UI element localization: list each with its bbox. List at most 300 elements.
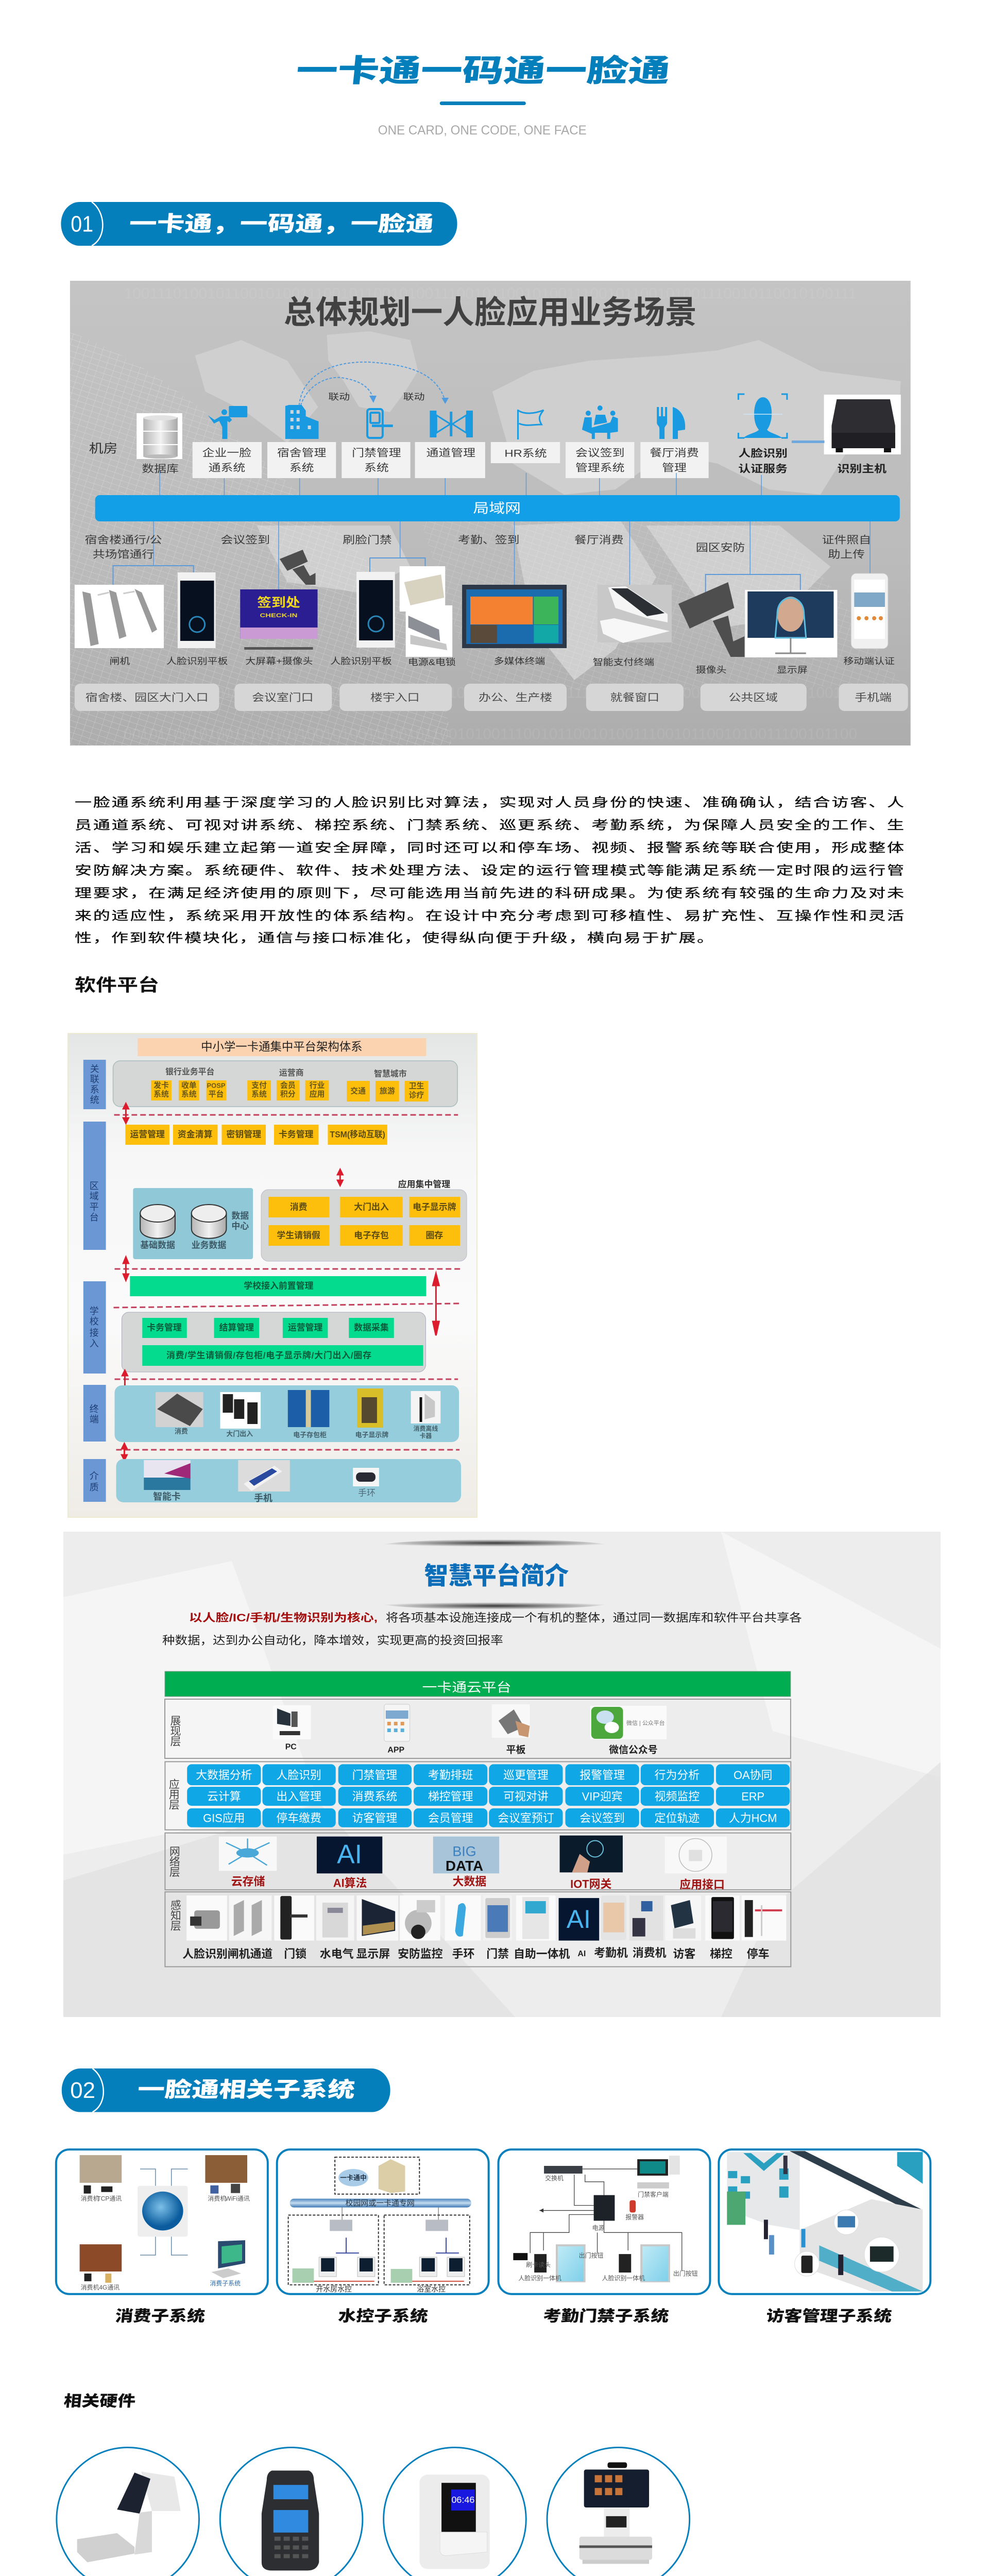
- related systems group: 会员: [280, 1080, 296, 1090]
- perception layer: 知: [170, 1910, 181, 1922]
- device labels: 访客: [673, 1947, 695, 1960]
- binary backdrop: 0010110010100111001011001010011100101100101001110010110010100111001011001010011100101100: [124, 725, 857, 743]
- network layer: [165, 1833, 791, 1891]
- machine room label: 机房: [89, 442, 117, 455]
- perception layer: [165, 1892, 791, 1967]
- card: attendance access subsystem: 门禁客户端: [638, 2191, 669, 2198]
- icon: IoT: [560, 1836, 623, 1872]
- terminal group: 大门出入: [226, 1430, 253, 1438]
- related systems group: 诊疗: [409, 1090, 424, 1100]
- scenario labels: 助上传: [828, 549, 865, 560]
- terminal group: 电子显示牌: [355, 1431, 388, 1439]
- icon: face recognition: [738, 394, 787, 438]
- application management group: 圈存: [425, 1230, 443, 1241]
- card: water control subsystem: [277, 2149, 489, 2294]
- product captions: 多媒体终端: [494, 656, 545, 666]
- section header 02: 一脸通相关子系统: [137, 2078, 356, 2102]
- application layer: VIP迎宾: [582, 1790, 623, 1803]
- card: water control subsystem: 一卡通中: [340, 2174, 367, 2181]
- application management group: 大门出入: [354, 1202, 389, 1212]
- subsystem captions: 消费子系统: [114, 2308, 206, 2325]
- hardware: dual screen scale: [547, 2448, 690, 2576]
- application management group: 学生请销假: [277, 1230, 320, 1241]
- section header 01: 一卡通，一码通，一脸通: [128, 212, 435, 236]
- icon: big data: BIG: [452, 1844, 476, 1859]
- box: HR: HR系统: [504, 448, 547, 459]
- subtitle: ONE CARD, ONE CODE, ONE FACE: [378, 123, 587, 138]
- subsystem captions: 考勤门禁子系统: [542, 2308, 670, 2325]
- media group: 手机: [254, 1493, 272, 1503]
- school access group: 卡务管理: [147, 1322, 182, 1333]
- layer labels: 域: [90, 1191, 99, 1201]
- application layer: 会议签到: [579, 1811, 625, 1824]
- box: access system: 门禁管理: [352, 447, 401, 459]
- icon: PC: [273, 1705, 311, 1739]
- location chips: [75, 684, 908, 711]
- presentation layer: PC: [285, 1742, 297, 1752]
- binary backdrop: 1001110100101100101001110010110010100111001011001010011100101100101001110010110010100111: [124, 285, 857, 302]
- panel heading: 总体规划一人脸应用业务场景: [284, 295, 697, 331]
- application management group: 消费: [290, 1202, 308, 1212]
- application layer: 巡更管理: [503, 1769, 549, 1782]
- application layer: 梯控管理: [428, 1790, 473, 1803]
- related systems group: 收单: [181, 1081, 197, 1090]
- panel: face application business scenario: [70, 281, 911, 745]
- icon: dorm building: [285, 405, 318, 439]
- body paragraph: 一脸通系统利用基于深度学习的人脸识别比对算法，实现对人员身份的快速、准确确认，结合访客、人: [75, 796, 904, 809]
- school access group: 消费/学生请销假/存包柜/电子显示牌/大门出入/圈存: [166, 1350, 371, 1361]
- presentation layer: [165, 1699, 791, 1758]
- card: consumption subsystem: 消费子系统: [210, 2280, 241, 2287]
- related systems group: 应用: [310, 1089, 325, 1099]
- body paragraph: [75, 796, 904, 945]
- product captions: 移动端认证: [843, 656, 895, 666]
- box: canteen: [640, 442, 709, 478]
- product: multimedia terminal: [462, 585, 567, 648]
- heading bottom shadow: [374, 1602, 615, 1609]
- body paragraph: 安防解决方案。系统硬件、软件、技术处理方法、设定的运行管理模式等能满足系统一定时限的运行管: [75, 864, 904, 877]
- school access group: 运营管理: [288, 1322, 322, 1333]
- card: water control subsystem: 校园网或一卡通专网: [346, 2199, 415, 2208]
- backdrop polygons: [63, 1532, 941, 1855]
- media group: 智能卡: [153, 1491, 181, 1502]
- linkage arcs: [299, 362, 445, 405]
- cloud platform bar: [165, 1671, 791, 1697]
- scenario labels: 会议签到: [220, 534, 270, 546]
- icon: big data: DATA: [446, 1858, 483, 1874]
- related systems group: 系统: [154, 1089, 169, 1099]
- database label: 数据库: [142, 463, 179, 474]
- network layer: 应用接口: [679, 1878, 725, 1891]
- icon: door lock: [367, 409, 383, 438]
- icon: wechat: 微信 | 公众平台: [626, 1719, 665, 1726]
- location chips: 宿舍楼、园区大门入口: [86, 692, 209, 703]
- application layer: GIS应用: [203, 1811, 245, 1824]
- related systems group: 卫生: [409, 1081, 424, 1091]
- scenario labels: 证件照自: [822, 534, 871, 546]
- section header 02: 02: [70, 2078, 95, 2103]
- scenario labels: 共场馆通行: [93, 549, 154, 560]
- application layer: 人脸识别: [276, 1769, 321, 1782]
- related systems group: 系统: [251, 1089, 267, 1099]
- application layer: 用: [169, 1789, 180, 1801]
- related systems group: 智慧城市: [374, 1069, 407, 1079]
- software platform heading: 软件平台: [75, 975, 159, 995]
- panel: smart platform intro: [63, 1532, 941, 2017]
- card: attendance access subsystem: [499, 2149, 710, 2294]
- application layer: 定位轨迹: [655, 1811, 700, 1824]
- layer labels: 接: [90, 1328, 99, 1338]
- lower platform layers: [165, 1761, 791, 1967]
- scenario labels: 餐厅消费: [574, 534, 624, 546]
- box: canteen: 餐厅消费: [650, 447, 699, 459]
- product captions: 智能支付终端: [593, 657, 654, 667]
- card: water control subsystem: 浴室水控: [417, 2285, 446, 2293]
- layer labels: 台: [90, 1212, 99, 1223]
- box: enterprise system: [193, 442, 262, 478]
- hardware and product list: [57, 2448, 926, 2576]
- presentation layer: 微信公众号: [609, 1744, 658, 1756]
- card: attendance access subsystem: 人脸识别一体机: [602, 2275, 645, 2282]
- related systems group: 支付: [251, 1081, 267, 1090]
- media group: 手环: [358, 1488, 376, 1498]
- subsystem captions: 访客管理子系统: [765, 2308, 893, 2325]
- heading: 智慧平台简介: [424, 1563, 569, 1589]
- card: water control subsystem: 开水房水控: [316, 2285, 352, 2293]
- hardware: water control: [384, 2448, 526, 2576]
- product captions: 显示屏: [777, 665, 808, 675]
- application layer: 考勤排班: [428, 1769, 473, 1782]
- related systems group: 银行业务平台: [165, 1066, 214, 1077]
- layer labels: 介: [90, 1471, 99, 1481]
- icon: recognition host: [824, 395, 901, 454]
- icon: enterprise person: [208, 406, 247, 439]
- heading top shadow: [374, 1539, 615, 1547]
- product: camera 2: [678, 582, 744, 657]
- intro red lead: 以人脸/IC/手机/生物识别为核心,: [189, 1612, 378, 1624]
- network layer: 网: [169, 1846, 180, 1858]
- application layer: OA协同: [734, 1769, 772, 1782]
- box: channel: 通道管理: [426, 447, 475, 459]
- layer labels: [83, 1060, 106, 1502]
- product captions: 电源&电锁: [408, 657, 456, 667]
- school access group: 数据采集: [354, 1322, 389, 1333]
- product: display: [745, 590, 837, 657]
- application layer: 层: [169, 1799, 180, 1811]
- connector: [792, 440, 825, 443]
- presentation layer: APP: [387, 1745, 404, 1755]
- terminal group: 卡器: [420, 1432, 432, 1439]
- arrow: [433, 1274, 439, 1335]
- terminal group: 消费: [175, 1427, 188, 1435]
- host label: 识别主机: [837, 463, 886, 474]
- divider: [113, 1303, 461, 1308]
- arrow: [123, 1257, 128, 1280]
- icon: channel gate: [430, 411, 473, 437]
- layer labels: 关: [90, 1064, 99, 1074]
- box: dorm system: [267, 442, 336, 478]
- application layer: 会议室预订: [498, 1811, 554, 1824]
- product: power box and lock: [400, 566, 452, 657]
- connectors to LAN: [160, 471, 761, 495]
- card: visitor management subsystem: [719, 2149, 930, 2294]
- related systems group: 交通: [350, 1086, 366, 1096]
- linkage label: 联动: [328, 392, 350, 402]
- product captions: 大屏幕+摄像头: [245, 656, 313, 666]
- icon: meeting: [582, 405, 618, 439]
- application layer: 访客管理: [352, 1811, 397, 1824]
- box: access system: 系统: [364, 462, 389, 473]
- panel: platform architecture: [68, 1033, 477, 1517]
- device images: [186, 1895, 786, 1941]
- product: face tablet 2: [356, 572, 395, 648]
- intro line 1: 将各项基本设施连接成一个有机的整体，通过同一数据库和软件平台共享各: [386, 1612, 802, 1624]
- application layer: 大数据分析: [196, 1769, 252, 1782]
- scenario labels: 考勤、签到: [458, 534, 520, 546]
- layer labels: 质: [90, 1482, 99, 1493]
- intro line 2: 种数据，达到办公自动化，降本增效，实现更高的投资回报率: [162, 1634, 503, 1647]
- presentation layer: 层: [170, 1736, 181, 1748]
- application management group: 电子显示牌: [413, 1202, 456, 1212]
- school access bar: [130, 1276, 426, 1296]
- linkage label 2: 联动: [403, 392, 424, 402]
- application management group: [261, 1190, 467, 1261]
- media group: [116, 1459, 461, 1503]
- product: big screen: CHECK-IN: [260, 612, 297, 618]
- page header: [61, 54, 672, 246]
- product captions: 闸机: [110, 656, 130, 666]
- terminal group: 电子存包柜: [293, 1431, 327, 1439]
- card: consumption subsystem: TCP通讯: [97, 2195, 122, 2202]
- application layer: 云计算: [207, 1790, 241, 1803]
- icon: tablet: [492, 1704, 530, 1738]
- body paragraph: 活、学习和娱乐建立起第一道安全屏障，同时还可以和停车场、视频、报警系统等联合使用，形成整体: [75, 841, 904, 855]
- device labels: 水电气: [320, 1947, 354, 1960]
- related systems group: 平台: [209, 1089, 224, 1099]
- device labels: [182, 1946, 769, 1960]
- network layer: 大数据: [453, 1875, 486, 1888]
- related systems group: 行业: [310, 1081, 325, 1090]
- card: consumption subsystem: 消费机: [81, 2284, 99, 2291]
- product: big screen: 签到处: [257, 596, 300, 609]
- icon: cutlery: [657, 407, 685, 439]
- location chips: 办公、生产楼: [479, 692, 552, 703]
- application layer: 应: [169, 1779, 180, 1791]
- divider: [116, 1449, 459, 1451]
- card: consumption subsystem: 消费机: [81, 2195, 99, 2202]
- product: turnstile: [75, 585, 164, 648]
- perception layer: 层: [170, 1920, 181, 1932]
- location chips: 楼宇入口: [370, 692, 419, 703]
- platform orange row: TSM(移动互联): [330, 1129, 385, 1140]
- body paragraph: 员通道系统、可视对讲系统、梯控系统、门禁系统、巡更系统、考勤系统，为保障人员安全的工作、生: [75, 819, 904, 832]
- box: HR: [491, 442, 560, 463]
- network layer: 络: [169, 1856, 180, 1868]
- perception layer: 感: [170, 1900, 181, 1911]
- application layer: 停车缴费: [276, 1811, 321, 1824]
- device labels: 消费机: [633, 1946, 667, 1959]
- icon: app interface: [665, 1837, 727, 1873]
- device labels: 手环: [452, 1947, 474, 1960]
- location chips: 手机端: [855, 692, 892, 703]
- device labels: 显示屏: [356, 1947, 390, 1960]
- layer labels: 系: [90, 1084, 99, 1095]
- divider: [114, 1114, 458, 1116]
- box: enterprise system: 企业一脸: [202, 447, 251, 459]
- device labels: 人脸识别闸机通道: [182, 1947, 272, 1960]
- related systems group: 旅游: [380, 1086, 395, 1096]
- architecture title: [138, 1038, 426, 1056]
- device labels: 门锁: [284, 1947, 306, 1960]
- product captions: [110, 656, 895, 675]
- layer labels: 区: [90, 1181, 99, 1191]
- box: dorm system: 宿舍管理: [277, 447, 327, 459]
- device labels: AI: [577, 1950, 586, 1958]
- application layer: 可视对讲: [503, 1790, 549, 1803]
- box: canteen: 管理: [662, 462, 687, 473]
- scenario labels: [84, 534, 871, 560]
- device labels: 安防监控: [398, 1947, 443, 1960]
- network layer: IOT网关: [570, 1878, 611, 1891]
- related systems group: POSP: [207, 1081, 226, 1090]
- layer labels: 端: [90, 1414, 99, 1425]
- box: access system: [342, 442, 411, 478]
- face recognition service label: [738, 448, 788, 474]
- icon: wechat: [590, 1706, 667, 1739]
- network layer: 云存储: [231, 1875, 265, 1888]
- school access group: 结算管理: [219, 1322, 254, 1333]
- layer labels: 学: [90, 1306, 99, 1316]
- location chips: 公共区域: [729, 692, 778, 703]
- box: meeting: 管理系统: [575, 462, 624, 473]
- terminal group: 消费离线: [414, 1425, 438, 1432]
- icon: HR flag: [518, 410, 543, 439]
- product: face tablet: [178, 572, 215, 648]
- product: payment terminal: [598, 585, 672, 643]
- card: attendance access subsystem: 出门按钮: [673, 2269, 698, 2277]
- section header 02: [62, 2069, 390, 2112]
- system label boxes: [193, 442, 709, 478]
- arrow: [122, 1370, 127, 1392]
- box: meeting: [566, 442, 634, 478]
- device labels: 门禁: [486, 1947, 509, 1960]
- layer labels: 联: [90, 1074, 99, 1084]
- box: enterprise system: 通系统: [209, 462, 245, 473]
- card: consumption subsystem: WiFi通讯: [225, 2195, 250, 2202]
- network layer: 层: [169, 1867, 180, 1878]
- LAN bar: 局域网: [473, 501, 521, 516]
- intro header and presentation layer: [162, 1539, 802, 1758]
- face recognition service label: 人脸识别: [738, 448, 788, 459]
- device images: AI: [567, 1905, 591, 1934]
- network layer: AI算法: [333, 1877, 367, 1890]
- related systems group: [113, 1061, 457, 1107]
- related systems group: 运营商: [279, 1068, 304, 1078]
- card: attendance access subsystem: 交换机: [545, 2174, 564, 2182]
- presentation layer: 现: [170, 1725, 181, 1738]
- device labels: 停车: [747, 1947, 769, 1960]
- data center: 中心: [231, 1221, 249, 1231]
- card: consumption subsystem: 消费机: [208, 2195, 226, 2202]
- card: attendance access subsystem: 人脸识别一体机: [518, 2275, 561, 2282]
- card: attendance access subsystem: 出门按钮: [579, 2251, 604, 2259]
- school access group: [122, 1312, 425, 1372]
- section header 01: 01: [71, 211, 93, 236]
- connectors below LAN: [154, 521, 870, 592]
- platform orange row: [125, 1125, 387, 1145]
- title underline: [440, 101, 526, 105]
- school access bar: 学校接入前置管理: [244, 1280, 314, 1291]
- application management group: 电子存包: [354, 1230, 389, 1241]
- scenario labels: 刷脸门禁: [343, 534, 392, 546]
- box: channel: [415, 442, 485, 478]
- application layer: 出入管理: [276, 1790, 321, 1803]
- application layer: 门禁管理: [352, 1769, 397, 1782]
- world map backdrop: [195, 331, 901, 680]
- scenario labels: 宿舍楼通行/公: [84, 534, 162, 546]
- related systems group: 积分: [280, 1090, 296, 1099]
- related hardware heading: 相关硬件: [63, 2393, 136, 2410]
- subsystem captions: 水控子系统: [337, 2308, 429, 2325]
- platform orange row: 密钥管理: [226, 1129, 261, 1140]
- platform orange row: 资金清算: [178, 1129, 213, 1140]
- presentation layer: 平板: [506, 1744, 526, 1756]
- cloud platform bar: 一卡通云平台: [422, 1680, 511, 1694]
- data center: 业务数据: [192, 1240, 226, 1250]
- product: big screen: [240, 589, 318, 650]
- related systems group: 系统: [181, 1089, 197, 1099]
- card: attendance access subsystem: 电源: [592, 2224, 605, 2231]
- face recognition service label: 认证服务: [738, 463, 788, 474]
- presentation layer: 展: [170, 1715, 181, 1727]
- product: mobile phone: [851, 573, 888, 649]
- card: consumption subsystem: [56, 2149, 268, 2294]
- body paragraph: 性，作到软件模块化，通信与接口标准化，使得纵向便于升级，横向易于扩展。: [75, 931, 714, 945]
- platform orange row: 卡务管理: [279, 1129, 314, 1140]
- arrow: [337, 1170, 343, 1185]
- terminal group: [114, 1385, 459, 1442]
- product: camera: [280, 550, 316, 585]
- body paragraph: 理要求，在满足经济使用的原则下，尽可能选用当前先进的科研成果。为使系统有较强的生命力及对未: [75, 887, 904, 900]
- application management label: 应用集中管理: [398, 1179, 450, 1190]
- location chips: 会议室门口: [252, 692, 314, 703]
- location chips: 就餐窗口: [610, 692, 659, 703]
- box: dorm system: 系统: [289, 462, 314, 473]
- product captions: 人脸识别平板: [166, 656, 228, 666]
- data center: 基础数据: [140, 1240, 175, 1250]
- card: consumption subsystem: 4G通讯: [99, 2284, 120, 2291]
- icon: database: [137, 413, 182, 459]
- box: meeting: 会议签到: [575, 447, 624, 459]
- product captions: 人脸识别平板: [330, 656, 392, 666]
- data center: 数据: [231, 1211, 249, 1221]
- icon: cloud storage: [219, 1837, 277, 1871]
- divider: [114, 1379, 458, 1380]
- arrow: [122, 1444, 127, 1460]
- application layer: 人力HCM: [729, 1811, 777, 1824]
- platform orange row: 运营管理: [130, 1129, 165, 1140]
- binary backdrop: [124, 285, 857, 743]
- layer labels: 入: [90, 1338, 99, 1349]
- application layer: ERP: [741, 1790, 764, 1803]
- layer labels: 统: [90, 1095, 99, 1105]
- icon: AI: [317, 1837, 382, 1873]
- application layer: [165, 1761, 791, 1830]
- icon: AI: AI: [337, 1839, 362, 1869]
- LAN bar: [95, 495, 900, 521]
- device labels: 考勤机: [594, 1946, 628, 1959]
- section header 01: [61, 202, 457, 246]
